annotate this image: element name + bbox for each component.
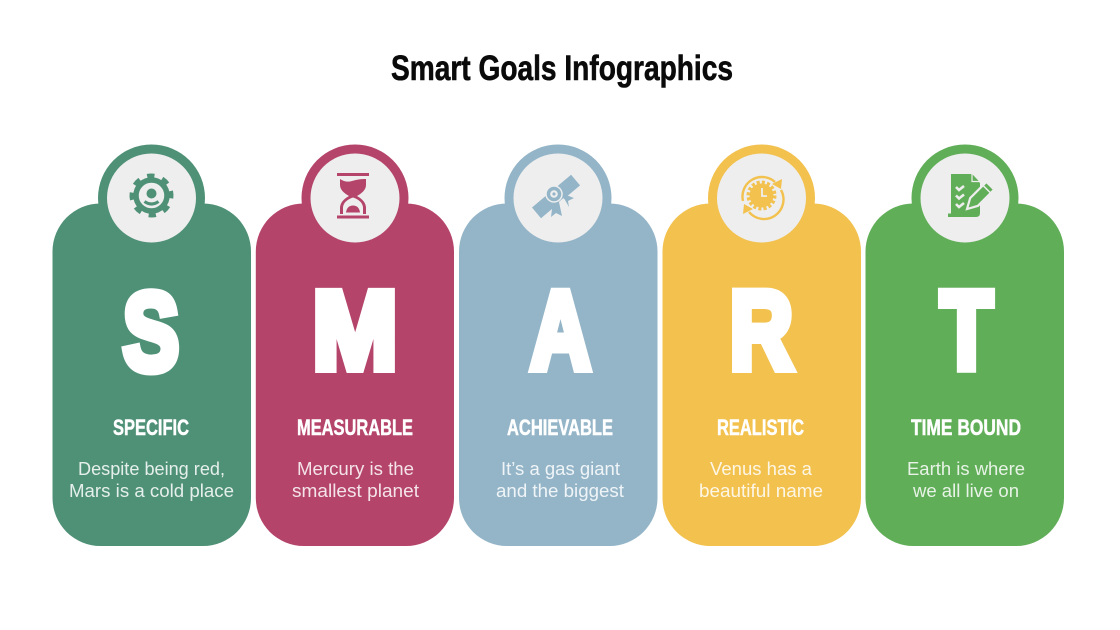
- icon: gear with person: [129, 173, 174, 218]
- card shape: [662, 144, 861, 546]
- letter S: S: [123, 271, 179, 394]
- description: [69, 459, 234, 501]
- letter M: M: [312, 270, 398, 392]
- card shape: [866, 144, 1064, 546]
- panel: achievable: [459, 144, 658, 546]
- heading: MEASURABLE: [297, 415, 413, 440]
- icon: checklist with pencil: [948, 173, 994, 217]
- description: Venus has a: [710, 459, 813, 479]
- icon badge: [310, 154, 400, 242]
- description: [496, 459, 624, 501]
- description: [699, 459, 823, 501]
- description: Earth is where: [907, 459, 1025, 479]
- description: beautiful name: [699, 481, 823, 501]
- icon badge: [514, 154, 602, 242]
- description: It’s a gas giant: [501, 459, 620, 479]
- panel: measurable: [256, 144, 454, 546]
- icon badge: [920, 154, 1010, 242]
- panel: realistic: [662, 144, 861, 546]
- heading: SPECIFIC: [113, 415, 189, 440]
- icon: diploma: [532, 175, 580, 218]
- panel: specific: [52, 144, 251, 546]
- description: [907, 459, 1025, 501]
- description: and the biggest: [496, 481, 624, 501]
- icon: hourglass: [337, 173, 369, 218]
- description: Mars is a cold place: [69, 481, 234, 501]
- letter R: R: [730, 270, 793, 392]
- heading: TIME BOUND: [911, 415, 1021, 440]
- icon badge: [107, 154, 196, 242]
- description: Mercury is the: [297, 459, 414, 479]
- letter T: T: [940, 270, 992, 392]
- heading: ACHIEVABLE: [507, 415, 613, 440]
- card shape: [459, 144, 658, 546]
- description: Despite being red,: [78, 459, 225, 479]
- heading: REALISTIC: [717, 415, 804, 440]
- description: [292, 459, 419, 501]
- card shape: [52, 144, 251, 546]
- description: we all live on: [912, 481, 1019, 501]
- description: smallest planet: [292, 481, 419, 501]
- card shape: [256, 144, 454, 546]
- panel: time bound: [866, 144, 1064, 546]
- icon badge: [717, 154, 806, 242]
- letter A: A: [530, 270, 590, 392]
- title: Smart Goals Infographics: [391, 49, 733, 88]
- icon: clock with arrows: [742, 177, 783, 219]
